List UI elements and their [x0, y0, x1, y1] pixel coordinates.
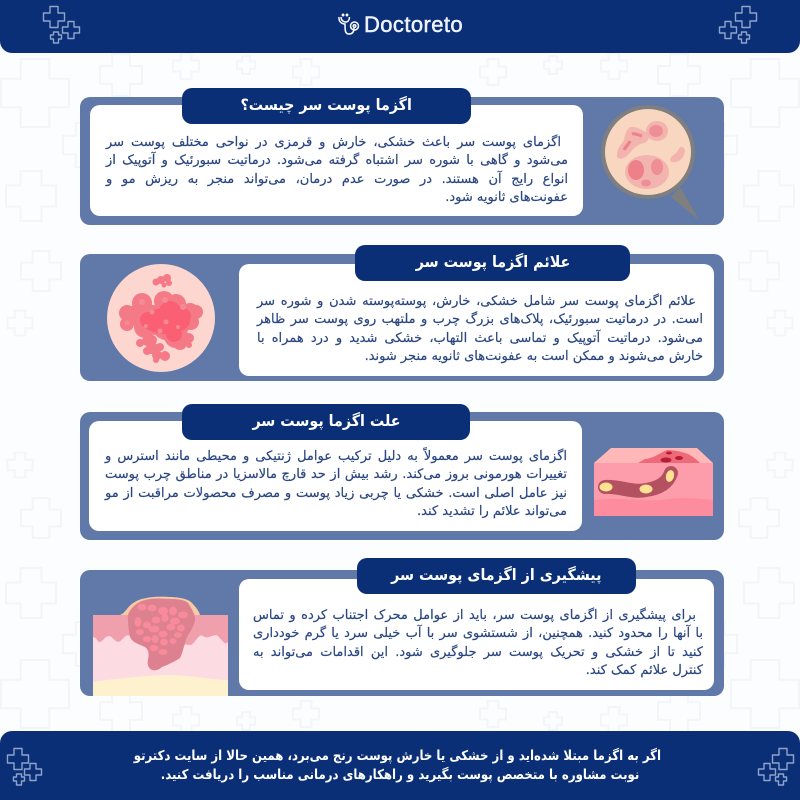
heading: prevention: پیشگیری از اگزمای پوست سر [391, 566, 602, 584]
panel: causes [80, 412, 724, 540]
icon: footer crosses left [6, 748, 42, 786]
panel: symptoms [80, 254, 724, 381]
footer banner [0, 731, 800, 800]
body text: انواع رایج آن هستند. در صورت عدم درمان، می‌تواند منجر به ریزش مو و [106, 172, 568, 187]
heading: causes: علت اگزما پوست سر [252, 412, 400, 430]
body text [104, 447, 567, 519]
body text: کنید تا از خشکی و تحریک پوست سر جلوگیری شود. این اقدامات می‌تواند به [253, 645, 703, 660]
body text: می‌شود. درماتیت آتوپیک و تماسی باعث التهاب، خشکی شدید و درد همراه با [257, 331, 703, 346]
icon: magnified skin [601, 105, 699, 220]
icon: skin lesion cross-section [93, 596, 228, 696]
text box [239, 579, 714, 690]
body text: خارش می‌شوند و ممکن است به عفونت‌های ثانویه منجر شوند. [365, 349, 703, 364]
heading: what is scalp eczema: اگزما پوست سر چیست؟ [241, 96, 412, 114]
body text [105, 134, 568, 205]
heading: symptoms [355, 245, 630, 281]
body text: علائم اگزمای پوست سر شامل خشکی، خارش، پوسته‌پوسته شدن و شوره سر [257, 294, 696, 309]
heading: what is scalp eczema [182, 88, 471, 124]
body text: تغییرات هورمونی بروز می‌کند. رشد بیش از حد قارچ مالاسزیا در مناطق چرب پوست [105, 467, 567, 482]
body text: کنترل علائم کمک کند. [586, 663, 703, 678]
body text: است. در درماتیت سبورئیک، پلاک‌های بزرگ چرب و ملتهب روی پوست سر ظاهر [257, 312, 703, 327]
footer call to action text: اگر به اگزما مبتلا شده‌اید و از خشکی یا خارش پوست رنج می‌برد، همین حالا از سایت دکترتو [134, 748, 661, 764]
text box [239, 264, 714, 376]
body text: می‌شود و گاهی با شوره سر اشتباه گرفته می‌شود. درماتیت سبورئیک و آتوپیک از [106, 153, 568, 168]
text box [89, 421, 582, 531]
text box [90, 105, 583, 216]
panel: prevention [80, 570, 724, 696]
icon: footer crosses right [758, 748, 794, 786]
footer call to action text [133, 748, 661, 783]
heading: symptoms: علائم اگزما پوست سر [415, 253, 570, 271]
logo: stethoscope icon [338, 14, 360, 35]
body text: عفونت‌های ثانویه شود. [445, 190, 568, 205]
body text: نیز عامل اصلی است. خشکی یا چربی زیاد پوست و مصرف محصولات مراقبت از مو [105, 486, 567, 501]
footer call to action text: نوبت مشاوره با متخصص پوست بگیرید و راهکارهای درمانی مناسب را دریافت کنید. [161, 767, 639, 783]
heading: prevention [357, 558, 636, 594]
body text [256, 293, 703, 364]
icon: header crosses right [718, 6, 758, 44]
icon: skin plaque circle [107, 264, 215, 372]
body text [253, 607, 704, 678]
body text: اگزمای پوست سر معمولاً به دلیل ترکیب عوامل ژنتیکی و محیطی مانند استرس و [105, 449, 567, 464]
body text: برای پیشگیری از اگزمای پوست سر، باید از عوامل محرک اجتناب کرده و تماس [253, 608, 696, 623]
icon: skin cross-section with follicle [594, 448, 713, 516]
icon: header crosses left [42, 6, 80, 44]
heading: causes [182, 404, 470, 440]
body text: اگزمای پوست سر باعث خشکی، خارش و قرمزی در نواحی مختلف پوست سر [106, 135, 561, 150]
header banner [0, 0, 800, 53]
logo: wordmark: Doctoreto [364, 12, 463, 37]
body text: با آنها را محدود کنید. همچنین، از شستشوی سر با آب خیلی سرد یا گرم خودداری [253, 626, 703, 641]
body text: می‌تواند علائم را تشدید کند. [417, 504, 567, 519]
panel: what is scalp eczema [80, 97, 724, 225]
